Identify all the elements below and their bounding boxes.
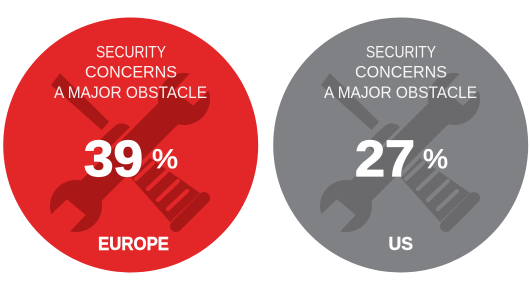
value: 27% bbox=[355, 130, 448, 187]
heading: US: SECURITY bbox=[366, 42, 436, 62]
value: 39%: 39 bbox=[84, 130, 143, 187]
value: 27%: % bbox=[423, 144, 448, 174]
heading: US: CONCERNS bbox=[355, 63, 447, 82]
value: 39%: % bbox=[152, 144, 178, 174]
icon: crossed wrench and screwdriver bbox=[49, 71, 212, 233]
heading: Europe: CONCERNS bbox=[85, 63, 177, 82]
icon: crossed wrench and screwdriver bbox=[319, 71, 482, 233]
heading: Europe: SECURITY bbox=[96, 42, 166, 62]
label: Europe: EUROPE bbox=[98, 234, 169, 254]
circle: US background bbox=[273, 18, 528, 272]
value: 27%: 27 bbox=[355, 130, 415, 187]
heading: Europe bbox=[54, 42, 207, 102]
panel: US bbox=[273, 18, 528, 272]
panel: Europe bbox=[3, 18, 258, 272]
label: US: US bbox=[388, 234, 413, 254]
heading: Europe: A MAJOR OBSTACLE bbox=[54, 83, 207, 102]
heading: US: A MAJOR OBSTACLE bbox=[324, 83, 477, 102]
heading: US bbox=[324, 42, 477, 102]
value: 39% bbox=[84, 130, 178, 187]
circle: Europe background bbox=[3, 18, 258, 272]
